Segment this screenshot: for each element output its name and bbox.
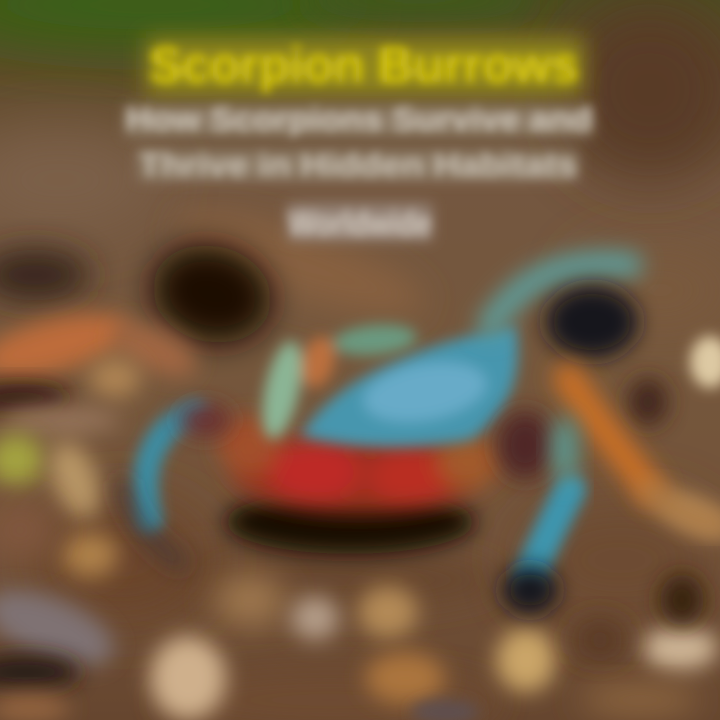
- subtitle text: Worldwide: [289, 205, 431, 243]
- scorpion orange leg: [568, 378, 650, 490]
- subtitle text: [125, 101, 593, 243]
- scorpion left blue leg: [146, 412, 195, 520]
- scorpion green-orange front segment: [255, 321, 418, 442]
- scorpion dark cavity under tail: [546, 286, 638, 358]
- right debris: [628, 336, 720, 546]
- scorpion right blue leg: [530, 490, 570, 575]
- burrow hole: [142, 232, 282, 356]
- scorpion tail arc: [490, 264, 630, 325]
- subtitle text: How Scorpions Survive and: [126, 101, 592, 137]
- illustration: scorpion: [122, 264, 720, 614]
- title: Scorpion Burrows: [149, 37, 579, 93]
- scorpion red underbody: [218, 415, 502, 513]
- foreground pebbles: [150, 574, 718, 720]
- subtitle text: Thrive in Hidden Habitats: [139, 147, 577, 183]
- left debris: wood and leaves: [0, 249, 204, 720]
- scorpion shadow: [225, 490, 475, 554]
- scorpion blue body: [300, 325, 518, 447]
